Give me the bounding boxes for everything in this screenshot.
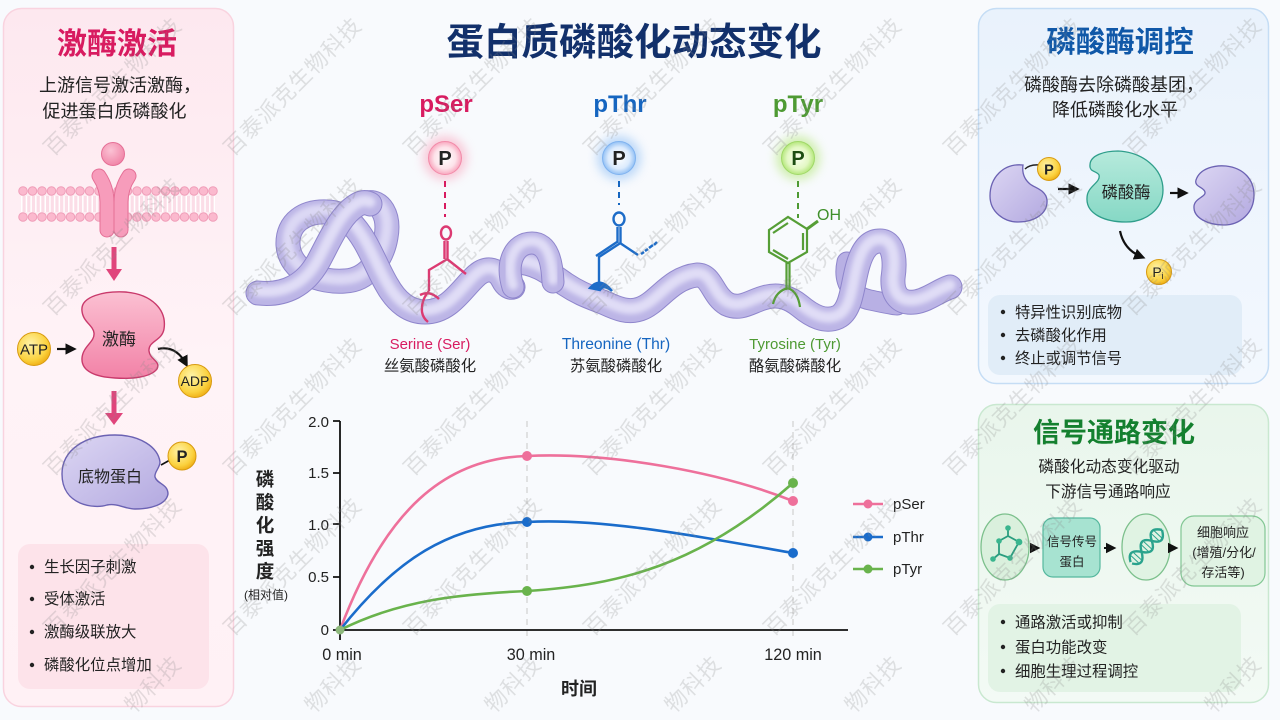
description: phosphatase: 降低磷酸化水平 <box>1052 100 1178 120</box>
watermark: 百泰派克生物科技 <box>399 173 547 321</box>
line chart: phosphorylation over time <box>244 414 925 699</box>
heading: signalling pathway: 信号通路变化 <box>1033 418 1195 448</box>
list: kinase points: 激酶级联放大 <box>44 623 136 641</box>
side chain: serine <box>420 226 466 322</box>
caption: threonine: Threonine (Thr) <box>562 336 670 353</box>
list: pathway points: 蛋白功能改变 <box>1015 638 1107 656</box>
box: cellular response: 存活等) <box>1201 565 1245 580</box>
list: phosphatase points: 终止或调节信号 <box>1015 350 1122 368</box>
icon: kinase: 激酶 <box>102 330 136 349</box>
watermark: 百泰派克生物科技 <box>579 333 727 481</box>
y axis title: 酸 <box>256 492 275 513</box>
arrow: from phosphatase <box>1170 192 1185 194</box>
watermark: 百泰派克生物科技 <box>579 13 727 161</box>
arrow: DNA to response <box>1169 547 1175 549</box>
legend: pTyr <box>893 561 922 578</box>
watermark: 百泰派克生物科技 <box>759 173 907 321</box>
watermark: 物科技 <box>660 651 726 718</box>
icon: substrate protein: 底物蛋白 <box>78 468 142 486</box>
watermark: 百泰派克生物科技 <box>579 493 727 641</box>
icon: phosphate pSer <box>423 136 467 180</box>
box: signal protein: 信号传号 <box>1047 534 1097 549</box>
x tick labels: 30 min <box>507 646 555 664</box>
icon: inorganic phosphate: P <box>1152 264 1162 280</box>
watermark: 百泰派克生物科技 <box>219 493 367 641</box>
icon: DNA helix <box>1122 514 1170 580</box>
list: kinase points: 受体激活 <box>44 590 106 608</box>
description: phosphatase: 磷酸酶去除磷酸基团， <box>1024 75 1204 95</box>
list: kinase points: 生长因子刺激 <box>44 558 136 576</box>
arrow: protein to DNA <box>1104 547 1113 549</box>
list: kinase points: 磷酸化位点增加 <box>44 656 152 674</box>
watermark: 百泰派克生物科技 <box>399 333 547 481</box>
caption: tyrosine: 酪氨酸磷酸化 <box>749 357 841 375</box>
arrow: to phosphatase <box>1058 188 1076 190</box>
icon: phosphorylated substrate: P <box>1044 162 1054 178</box>
icon: phosphate pThr: P <box>612 148 626 170</box>
y axis unit: (相对值) <box>244 587 288 602</box>
y axis title: 磷 <box>256 469 275 490</box>
list: phosphatase points: 去磷酸化作用 <box>1015 328 1107 344</box>
watermark: 物科技 <box>1020 651 1086 718</box>
side chain: tyrosine <box>769 207 841 307</box>
watermark: 百泰派克生物科技 <box>1119 173 1267 321</box>
watermark: 百泰派克生物科技 <box>1119 493 1267 641</box>
watermark: 物科技 <box>300 651 366 718</box>
watermark: 百泰派克生物科技 <box>39 173 187 321</box>
watermark: 物科技 <box>1200 651 1266 718</box>
arrow: ATP to kinase <box>57 348 73 350</box>
label: pSer: pSer <box>419 91 473 118</box>
icon: substrate protein <box>62 435 196 509</box>
watermark: 百泰派克生物科技 <box>39 493 187 641</box>
box: cellular response <box>1181 516 1265 586</box>
description: kinase activation: 上游信号激活激酶， <box>39 76 201 96</box>
y tick labels: 1.0 <box>308 517 329 534</box>
watermark: 百泰派克生物科技 <box>939 13 1087 161</box>
y tick labels: 2.0 <box>308 414 329 431</box>
icon: kinase <box>82 292 164 378</box>
arrow: phosphate release <box>1120 231 1142 257</box>
watermark: 物科技 <box>480 651 546 718</box>
watermark: 百泰派克生物科技 <box>219 333 367 481</box>
y tick labels: 0.5 <box>308 569 329 586</box>
phosphosite: pSer <box>384 91 476 375</box>
icon: dephosphorylated substrate <box>1194 166 1254 225</box>
arrow: kinase to ADP <box>158 348 186 364</box>
arrow: receptor to kinase <box>106 247 122 281</box>
caption: threonine: 苏氨酸磷酸化 <box>570 357 662 375</box>
watermark: 物科技 <box>840 651 906 718</box>
legend <box>853 496 925 578</box>
watermark: 百泰派克生物科技 <box>1119 333 1267 481</box>
heading: phosphatase regulation: 磷酸酶调控 <box>1046 26 1194 59</box>
watermark: 百泰派克生物科技 <box>759 333 907 481</box>
description: signalling: 磷酸化动态变化驱动 <box>1038 458 1180 476</box>
icon: ATP <box>18 332 50 366</box>
icon: ATP: ATP <box>20 342 48 358</box>
arrow: kinase to substrate <box>105 391 123 425</box>
icon: molecule network <box>981 514 1029 580</box>
phosphosite: pThr <box>562 91 670 375</box>
description: kinase activation: 促进蛋白质磷酸化 <box>42 102 186 122</box>
series: pTyr <box>336 478 798 634</box>
watermark: 物科技 <box>120 651 186 718</box>
watermark: 百泰派克生物科技 <box>219 173 367 321</box>
arrow: molecule to protein <box>1030 547 1037 549</box>
icon: phosphatase: 磷酸酶 <box>1102 184 1150 202</box>
watermark: 百泰派克生物科技 <box>1119 13 1267 161</box>
caption: serine: 丝氨酸磷酸化 <box>384 357 476 375</box>
icon: phosphate pThr <box>597 136 641 180</box>
title: 蛋白质磷酸化动态变化 <box>446 21 822 63</box>
icon: phosphate pTyr: P <box>791 148 805 170</box>
watermark: 百泰派克生物科技 <box>39 13 187 161</box>
phosphosite: pTyr <box>749 91 841 375</box>
panel: phosphatase regulation <box>978 8 1268 384</box>
list: pathway points: 细胞生理过程调控 <box>1015 662 1138 680</box>
box: signal protein: 蛋白 <box>1059 554 1085 569</box>
dashed bond <box>444 181 446 217</box>
icon: ADP: ADP <box>181 373 209 389</box>
y tick labels: 0 <box>321 622 329 639</box>
watermark: 百泰派克生物科技 <box>579 173 727 321</box>
icon: phosphorylated substrate <box>990 158 1060 222</box>
panel: signalling pathway changes <box>978 404 1268 702</box>
caption: tyrosine: Tyrosine (Tyr) <box>749 336 841 353</box>
axes <box>333 421 848 640</box>
watermark: 百泰派克生物科技 <box>399 493 547 641</box>
watermark: 百泰派克生物科技 <box>939 173 1087 321</box>
label: pTyr: pTyr <box>773 91 823 118</box>
side chain: threonine <box>590 212 657 291</box>
box: cellular response: 细胞响应 <box>1197 525 1249 540</box>
list: pathway points <box>988 604 1241 692</box>
panel: kinase activation <box>4 8 234 706</box>
series: pThr <box>340 517 798 630</box>
dashed bond <box>797 181 799 218</box>
icon: cell membrane with receptor <box>21 142 215 230</box>
y axis title: 强 <box>256 538 275 559</box>
list: phosphatase points: 特异性识别底物 <box>1015 304 1122 322</box>
series: pSer <box>340 451 798 630</box>
icon: phosphate pTyr <box>776 136 820 180</box>
caption: serine: Serine (Ser) <box>390 336 470 353</box>
heading: kinase activation: 激酶激活 <box>57 28 177 61</box>
watermark: 百泰派克生物科技 <box>759 13 907 161</box>
y axis title: 度 <box>256 561 274 582</box>
description: signalling: 下游信号通路响应 <box>1045 482 1171 501</box>
watermark: 百泰派克生物科技 <box>939 333 1087 481</box>
list: phosphatase points <box>988 295 1242 375</box>
box: cellular response: (增殖/分化/ <box>1192 545 1256 560</box>
list: kinase points <box>18 544 209 689</box>
legend: pSer <box>893 496 925 513</box>
watermark: 百泰派克生物科技 <box>939 493 1087 641</box>
watermark: 百泰派克生物科技 <box>399 13 547 161</box>
icon: phosphate pSer: P <box>438 148 452 170</box>
watermark: 百泰派克生物科技 <box>39 333 187 481</box>
dashed bond <box>618 181 620 205</box>
x axis title: 时间 <box>561 679 597 699</box>
label: pThr: pThr <box>593 91 647 118</box>
icon: ADP <box>178 364 212 398</box>
watermark: 百泰派克生物科技 <box>219 13 367 161</box>
watermark: 百泰派克生物科技 <box>759 493 907 641</box>
icon: substrate protein: P <box>176 448 188 466</box>
x tick labels: 120 min <box>764 646 822 664</box>
protein ribbon <box>258 201 950 319</box>
list: pathway points: 通路激活或抑制 <box>1015 614 1123 632</box>
y tick labels: 1.5 <box>308 465 329 482</box>
side chain: tyrosine: OH <box>817 207 841 224</box>
icon: inorganic phosphate: i <box>1162 271 1164 281</box>
legend: pThr <box>893 529 924 546</box>
x tick labels: 0 min <box>322 646 362 664</box>
icon: inorganic phosphate <box>1146 260 1172 284</box>
icon: phosphatase <box>1087 151 1163 222</box>
gridlines <box>527 421 793 640</box>
y axis title: 化 <box>256 515 274 536</box>
box: signal protein <box>1043 518 1100 577</box>
